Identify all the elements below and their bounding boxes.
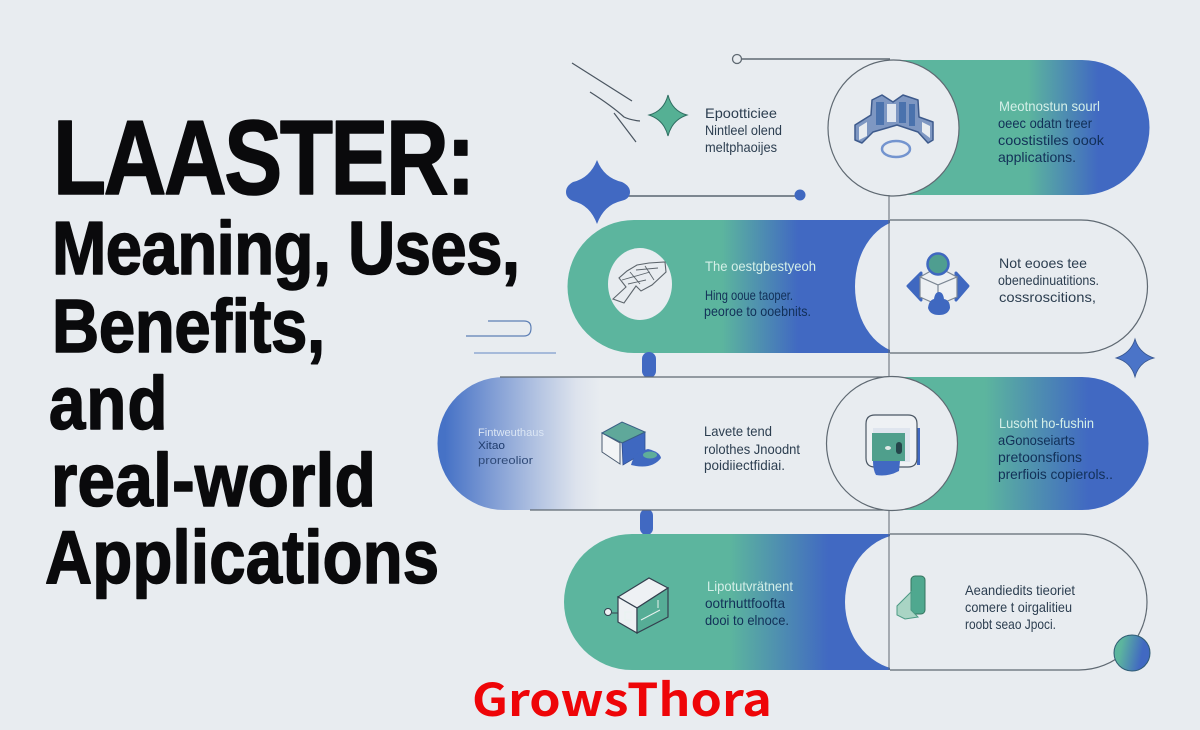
panel: row 2	[568, 220, 1148, 353]
text: row 3 middle: rolothes Jnoodnt	[704, 441, 800, 457]
text: row 2 left	[704, 258, 816, 319]
text: row 3 middle: Lavete tend	[704, 423, 772, 439]
text: row 3 left: Xitao	[478, 440, 505, 452]
panel: row 3	[438, 376, 1148, 510]
text block: top left: Epootticiee	[705, 105, 777, 121]
text: row 2 left: Hing ooue taoper.	[705, 287, 793, 303]
text: row 2 left: The oestgbestyeoh	[705, 258, 816, 274]
title	[45, 98, 520, 599]
speed lines	[466, 321, 556, 353]
icon: building arch	[855, 95, 933, 157]
title: and	[49, 361, 167, 445]
text: row 2 right	[998, 255, 1099, 305]
text: row 1: oeec odatn treer	[998, 115, 1092, 131]
text: row 1: applications.	[998, 149, 1076, 165]
icon: large blue star	[566, 160, 630, 224]
text block: top left	[705, 105, 782, 155]
text: row 4 left: dooi to elnoce.	[705, 612, 789, 628]
text: row 1	[998, 98, 1105, 165]
text: row 4 right: Aeandiedits tieoriet	[965, 582, 1075, 598]
text: row 3 right: pretoonsfions	[998, 449, 1082, 465]
icon: cube figure	[908, 254, 968, 315]
text: row 2 left: peoroe to ooebnits.	[704, 303, 811, 319]
icon: small blue star	[1116, 339, 1154, 377]
title: LAASTER:	[53, 98, 475, 217]
icon: small ring	[732, 54, 742, 64]
icon: gradient orb	[1114, 635, 1150, 671]
white circle with sketch icon	[608, 248, 672, 320]
title: Benefits,	[52, 284, 325, 368]
text: row 3 middle	[704, 423, 800, 473]
text: row 3 right	[998, 415, 1113, 482]
text: row 3 right: aGonoseiarts	[998, 432, 1075, 448]
text: row 3 left: proreolior	[478, 455, 533, 467]
text: row 4 right	[965, 582, 1075, 632]
title: Applications	[45, 515, 439, 599]
text: row 4 left: Lipotutvrätnent	[707, 578, 793, 594]
text: row 4 left: ootrhuttfoofta	[705, 595, 785, 611]
text: row 3 middle: poidiiectfidiai.	[704, 457, 785, 473]
text: row 4 right: roobt seao Jpoci.	[965, 616, 1056, 632]
icon: small device box	[602, 422, 661, 466]
text: row 3 left: Fintweuthaus	[478, 427, 544, 439]
connector: pill 2	[640, 509, 653, 535]
icon: 3d printer	[866, 415, 920, 476]
text: row 4 right: comere t oirgalitieu	[965, 599, 1072, 615]
brand: GrowsThora: GrowsThora	[472, 664, 772, 729]
text: row 2 right: cossroscitions,	[999, 289, 1096, 305]
icon: green cylinders	[897, 576, 925, 619]
decorative sketch lines with green star	[572, 63, 687, 142]
connector: vertical line	[888, 195, 890, 670]
circle: row 3	[826, 376, 958, 510]
title: Meaning, Uses,	[52, 206, 520, 290]
text: row 4 left	[705, 578, 793, 628]
text: row 3 left	[478, 427, 544, 467]
icon: package box	[604, 578, 668, 633]
text block: top left: meltphaoijes	[705, 139, 777, 155]
title: real-world	[51, 439, 376, 523]
blue star with connector	[566, 160, 806, 224]
panel: row 1	[732, 54, 1150, 196]
text: row 1: Meotnostun sourl	[999, 98, 1100, 114]
panel: row 4	[564, 534, 1150, 671]
text block: top left: Nintleel olend	[705, 122, 782, 138]
text: row 3 right: prerfiois copierols..	[998, 466, 1113, 482]
text: row 2 right: obenedinuatitions.	[998, 272, 1099, 288]
circle: row 1	[828, 60, 959, 196]
connector: pill 1	[642, 352, 656, 378]
text: row 3 right: Lusoht ho-fushin	[999, 415, 1094, 431]
text: row 1: coostistiles oook	[998, 132, 1105, 148]
text: row 2 right: Not eooes tee	[999, 255, 1087, 271]
icon: green star	[649, 95, 687, 136]
